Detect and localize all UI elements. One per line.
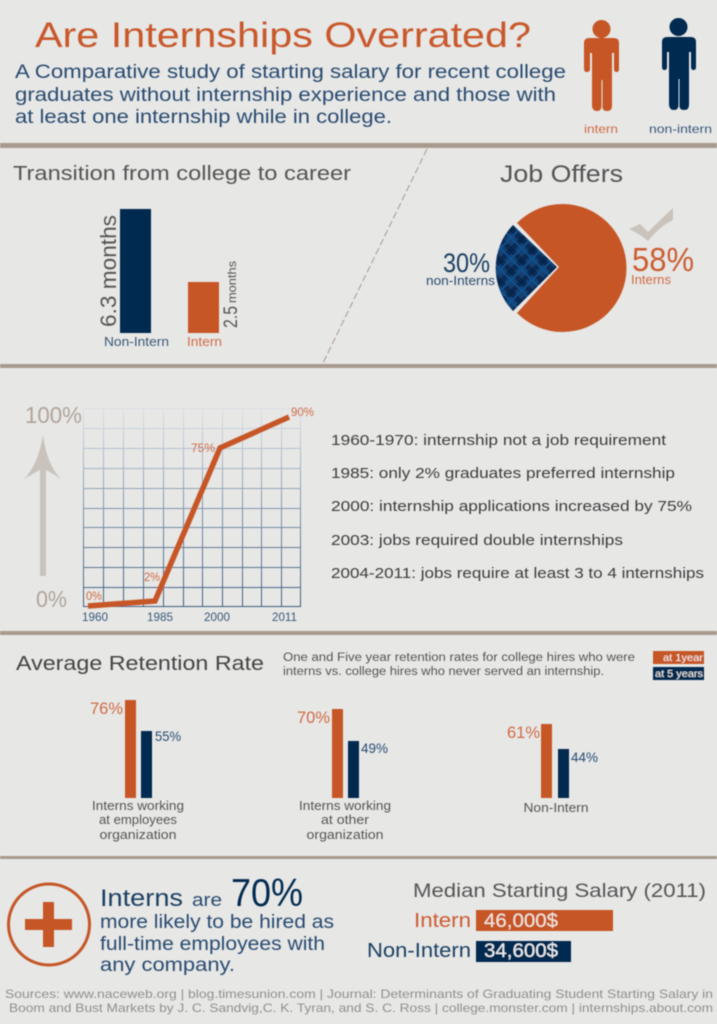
legend: at 1year bbox=[663, 652, 704, 664]
panel: average retention rate bbox=[16, 651, 704, 842]
description bbox=[283, 652, 635, 678]
statement text: full-time employees with bbox=[100, 934, 325, 955]
point labels: 75% bbox=[191, 443, 215, 455]
trend line bbox=[88, 417, 289, 606]
panel: transition from college to career bbox=[13, 163, 351, 349]
year axis labels: 1985 bbox=[147, 610, 173, 624]
statement text bbox=[100, 912, 334, 976]
scale label: 0%: 0% bbox=[36, 586, 67, 612]
subtitle text: at least one internship while in college. bbox=[15, 107, 392, 128]
group: non-intern: 44% bbox=[571, 749, 598, 765]
header panel bbox=[15, 16, 712, 136]
unit: months: months bbox=[225, 261, 239, 303]
group: non-intern: Non-Intern bbox=[524, 800, 588, 815]
subtitle text bbox=[15, 62, 566, 128]
sources: Boom and Bust Markets by J. C. Sandvig,C. K. Tyran, and S. C. Ross | college.monster.com | internships.about.com bbox=[9, 1001, 713, 1015]
legend: at 5 years bbox=[655, 668, 703, 680]
subtitle text: graduates without internship experience and those with bbox=[15, 85, 556, 106]
statement headline: Interns bbox=[100, 885, 183, 912]
label: non-intern: non-intern bbox=[649, 122, 712, 136]
point labels: 0% bbox=[86, 591, 102, 603]
group: non-intern: 61% bbox=[507, 723, 540, 742]
point labels: 2% bbox=[144, 572, 160, 584]
grid bbox=[84, 408, 301, 607]
year axis labels: 1960 bbox=[82, 610, 108, 624]
icon: check mark bbox=[629, 208, 673, 241]
year axis labels bbox=[82, 610, 297, 624]
value: 58%: 58% bbox=[632, 241, 694, 278]
panel: interns more likely to be hired bbox=[8, 872, 334, 976]
statement text: any company. bbox=[100, 955, 235, 976]
diagonal dashed separator bbox=[323, 149, 427, 363]
group: interns at employees organization: Interns working bbox=[92, 798, 184, 813]
sources: Sources: www.naceweb.org | blog.timesunion.com | Journal: Determinants of Graduating Student Starting Salary in bbox=[5, 987, 713, 1001]
label: non-intern: Non-Intern bbox=[104, 335, 169, 349]
group: non-intern bbox=[507, 723, 598, 815]
value: 70%: 70% bbox=[231, 872, 303, 915]
year axis labels: 2000 bbox=[204, 610, 230, 624]
panel: job offers bbox=[426, 161, 694, 332]
bar: intern bbox=[188, 282, 219, 333]
panel: timeline text: 1960-1970: internship not a job requirement bbox=[331, 432, 667, 449]
label: non-interns: non-Interns bbox=[426, 273, 496, 288]
group: interns at other organization: 70% bbox=[297, 708, 330, 727]
group: interns at employees organization: at employees bbox=[99, 812, 177, 827]
bar: non-intern bbox=[476, 941, 571, 962]
icon: plus in circle bbox=[8, 884, 90, 965]
panel: timeline text: 1985: only 2% graduates preferred internship bbox=[331, 465, 675, 482]
year axis labels: 2011 bbox=[272, 610, 297, 624]
point labels bbox=[86, 407, 314, 603]
point labels: 90% bbox=[291, 407, 314, 419]
panel: internship trend line chart bbox=[24, 402, 314, 624]
panel: timeline text: 2003: jobs required double internships bbox=[331, 532, 623, 549]
group: interns at employees organization bbox=[90, 699, 184, 842]
icon: non-intern figure bbox=[662, 18, 696, 110]
group: interns at other organization: Interns working bbox=[299, 798, 391, 813]
value: 6.3 months: 6.3 months bbox=[96, 215, 121, 327]
word: are: are bbox=[192, 890, 222, 910]
label: intern: Intern bbox=[187, 335, 222, 349]
icon: intern figure bbox=[584, 20, 619, 111]
scale label: 100%: 100% bbox=[25, 402, 82, 428]
label: intern: Intern bbox=[414, 910, 471, 932]
arrow: upward bbox=[24, 435, 61, 576]
statement text: more likely to be hired as bbox=[100, 912, 334, 933]
description: One and Five year retention rates for college hires who were bbox=[283, 652, 635, 664]
legend bbox=[653, 651, 704, 680]
label: interns: Interns bbox=[631, 272, 671, 287]
heading: Median Starting Salary (2011) bbox=[413, 880, 706, 902]
pie slice: interns bbox=[517, 204, 627, 332]
title: Are Internships Overrated? bbox=[35, 16, 531, 55]
value: 30%: 30% bbox=[443, 248, 490, 278]
panel: timeline text: 2000: internship applications increased by 75% bbox=[331, 498, 692, 515]
group: interns at employees organization: organization bbox=[100, 827, 176, 842]
heading: Average Retention Rate bbox=[16, 653, 264, 675]
panel: median starting salary bbox=[367, 880, 706, 962]
pie slice: non-interns bbox=[496, 225, 557, 311]
value: 46,000$: 46,000$ bbox=[484, 911, 558, 932]
bar: intern bbox=[476, 910, 613, 931]
group: interns at employees organization: 55% bbox=[155, 728, 181, 744]
group: interns at employees organization: 76% bbox=[90, 699, 123, 718]
subtitle text: A Comparative study of starting salary for recent college bbox=[15, 62, 566, 83]
sources bbox=[5, 987, 713, 1015]
value: 34,600$: 34,600$ bbox=[484, 941, 558, 962]
group: interns at other organization: 49% bbox=[361, 740, 388, 756]
heading: Job Offers bbox=[500, 161, 623, 188]
label: intern: intern bbox=[584, 122, 618, 136]
group: interns at other organization: organization bbox=[306, 827, 384, 842]
group: interns at other organization bbox=[297, 708, 391, 842]
group: interns at other organization: at other bbox=[321, 812, 370, 827]
panel: timeline text: 2004-2011: jobs require at least 3 to 4 internships bbox=[331, 565, 704, 582]
label: non-intern: Non-Intern bbox=[367, 940, 471, 962]
panel: timeline text bbox=[331, 432, 704, 582]
heading: Transition from college to career bbox=[13, 163, 351, 185]
value: 2.5: 2.5 bbox=[221, 306, 242, 328]
description: interns vs. college hires who never served an internship. bbox=[283, 666, 604, 678]
section dividers bbox=[0, 143, 717, 859]
bar: non-intern bbox=[120, 209, 151, 333]
